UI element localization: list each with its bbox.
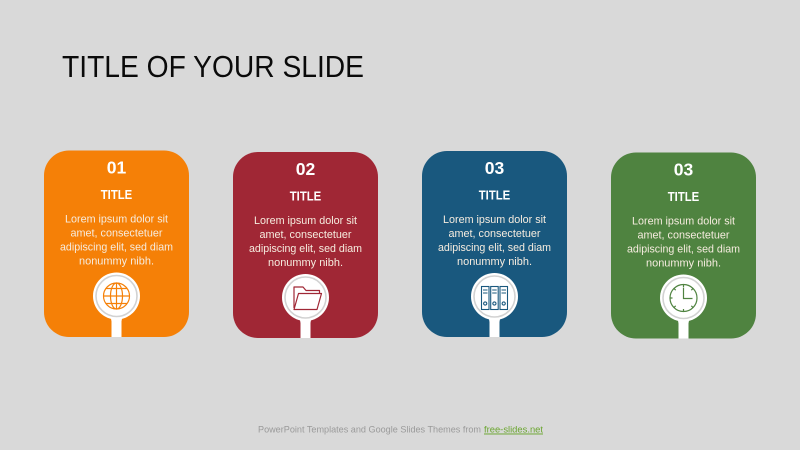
- title: TITLE OF YOUR SLIDE: [62, 49, 364, 84]
- card 04 number: 03: [674, 160, 694, 180]
- card 04 body text: Lorem ipsum dolor sit: [632, 216, 736, 228]
- card 04 body text: amet, consectetuer: [638, 230, 730, 242]
- card 02 number: 02: [296, 159, 316, 179]
- panel: card 03 green: [611, 152, 756, 338]
- card 03 body text: nonummy nibh.: [457, 256, 532, 268]
- card 04 body text: adipiscing elit, sed diam: [627, 244, 740, 256]
- card 01 body text: adipiscing elit, sed diam: [60, 242, 173, 254]
- panel: card 02: [233, 152, 378, 338]
- card 01 body text: [60, 214, 173, 268]
- card 03 body text: Lorem ipsum dolor sit: [443, 214, 547, 226]
- panel: card 01: [44, 150, 189, 337]
- card 01 body text: Lorem ipsum dolor sit: [65, 214, 169, 226]
- card 01 number: 01: [107, 158, 127, 178]
- card 03 magnifier badge: [471, 273, 518, 337]
- card 03 number: 03: [485, 158, 505, 178]
- card 04 body text: nonummy nibh.: [646, 258, 721, 270]
- card 03 heading: TITLE: [479, 187, 511, 202]
- card 01 body text: nonummy nibh.: [79, 256, 154, 268]
- card 02 body text: amet, consectetuer: [260, 229, 352, 241]
- footer credit: free-slides.net: [484, 424, 543, 436]
- card 03 body text: [438, 214, 551, 268]
- icon: folder: [294, 287, 322, 310]
- card 02 body text: adipiscing elit, sed diam: [249, 243, 362, 255]
- card 03 background: [422, 151, 567, 337]
- icon: binders: [482, 286, 508, 310]
- card 04 background: [611, 152, 756, 338]
- card 02 magnifier badge: [282, 274, 329, 338]
- card 03 body text: amet, consectetuer: [448, 228, 541, 240]
- card 01 heading: TITLE: [101, 187, 133, 202]
- card 04 magnifier badge: [660, 274, 707, 338]
- card 01 body text: amet, consectetuer: [70, 228, 163, 240]
- icon: clock: [670, 284, 697, 312]
- card 01 background: [44, 150, 189, 337]
- card 02 background: [233, 152, 378, 338]
- card 02 body text: Lorem ipsum dolor sit: [254, 215, 358, 227]
- card 04 heading: TITLE: [668, 189, 700, 204]
- card 01 magnifier badge: [93, 272, 140, 337]
- icon: globe: [104, 283, 130, 309]
- card 02 body text: nonummy nibh.: [268, 257, 343, 269]
- card 02 heading: TITLE: [290, 188, 322, 203]
- card 04 body text: [627, 216, 740, 270]
- card 02 body text: [249, 215, 362, 269]
- card 03 body text: adipiscing elit, sed diam: [438, 242, 551, 254]
- panel: card 03 blue: [422, 151, 567, 337]
- footer credit: PowerPoint Templates and Google Slides Themes from: [258, 424, 481, 436]
